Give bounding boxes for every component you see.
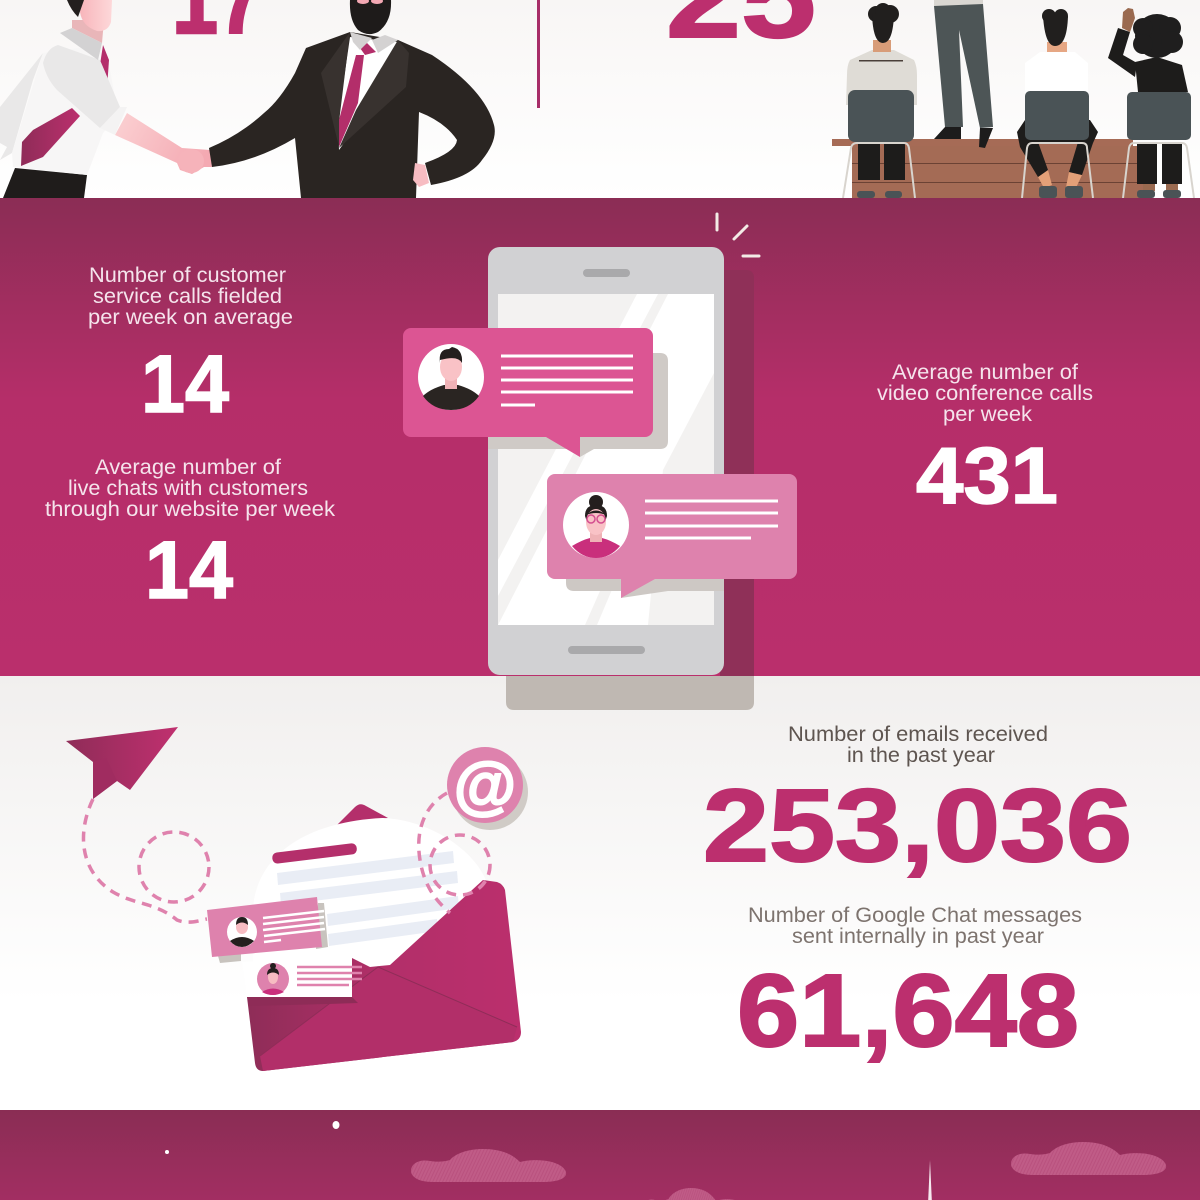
panel: email section (0, 676, 1200, 1110)
small chat card: woman (242, 957, 362, 997)
statistic number 431: 431 (916, 431, 1058, 520)
text: customer service calls label: per week on average (88, 306, 293, 329)
text: Google Chat messages label: sent internally in past year (792, 925, 1044, 948)
illustration: smartphone with chat bubbles (403, 214, 797, 710)
statistic number 14 chats: 14 (145, 525, 233, 616)
dashed loop circle (139, 832, 209, 902)
dashed flight path (83, 799, 207, 922)
cloud left (411, 1149, 566, 1182)
icon: at sign badge: @ (454, 749, 516, 821)
panel: bottom sky band (0, 1110, 1200, 1200)
illustration: handshake (0, 0, 495, 198)
panel: communication statistics band (0, 198, 1200, 710)
star dots (165, 1121, 340, 1154)
dashed letter circle (430, 835, 490, 895)
dashed at-sign path (419, 793, 450, 913)
cloud centre (642, 1188, 747, 1200)
illustration: open envelope (247, 804, 521, 1071)
text: emails received label: Number of emails received (788, 723, 1048, 746)
text: live chats label: through our website per week (45, 498, 336, 521)
illustration: audience on stage (832, 0, 1194, 198)
cloud right (1011, 1142, 1166, 1175)
text: live chats label: live chats with customers (68, 477, 308, 500)
text: Google Chat messages label: Number of Google Chat messages (748, 904, 1082, 927)
icon: at sign badge (447, 747, 528, 830)
text: video conference label: Average number of (892, 361, 1078, 384)
text: video conference label: per week (943, 403, 1033, 426)
panel: top section with handshake and audience (0, 0, 1200, 198)
statistic number 61,648: 61,648 (737, 953, 1079, 1068)
divider line (537, 0, 540, 108)
tower spire (928, 1160, 932, 1200)
text: emails received label: in the past year (847, 744, 995, 767)
speech bubble: woman (547, 474, 797, 598)
small chat card: man (207, 897, 328, 963)
text: video conference label: video conference calls (877, 382, 1093, 405)
statistic number 14 calls: 14 (141, 339, 229, 430)
text: customer service calls label: service calls fielded (93, 285, 282, 308)
speech bubble: man (403, 328, 668, 457)
icon: paper plane (66, 727, 178, 799)
statistic number 253,036: 253,036 (703, 768, 1132, 883)
text: customer service calls label: Number of customer (89, 264, 286, 287)
text: live chats label: Average number of (95, 456, 281, 479)
